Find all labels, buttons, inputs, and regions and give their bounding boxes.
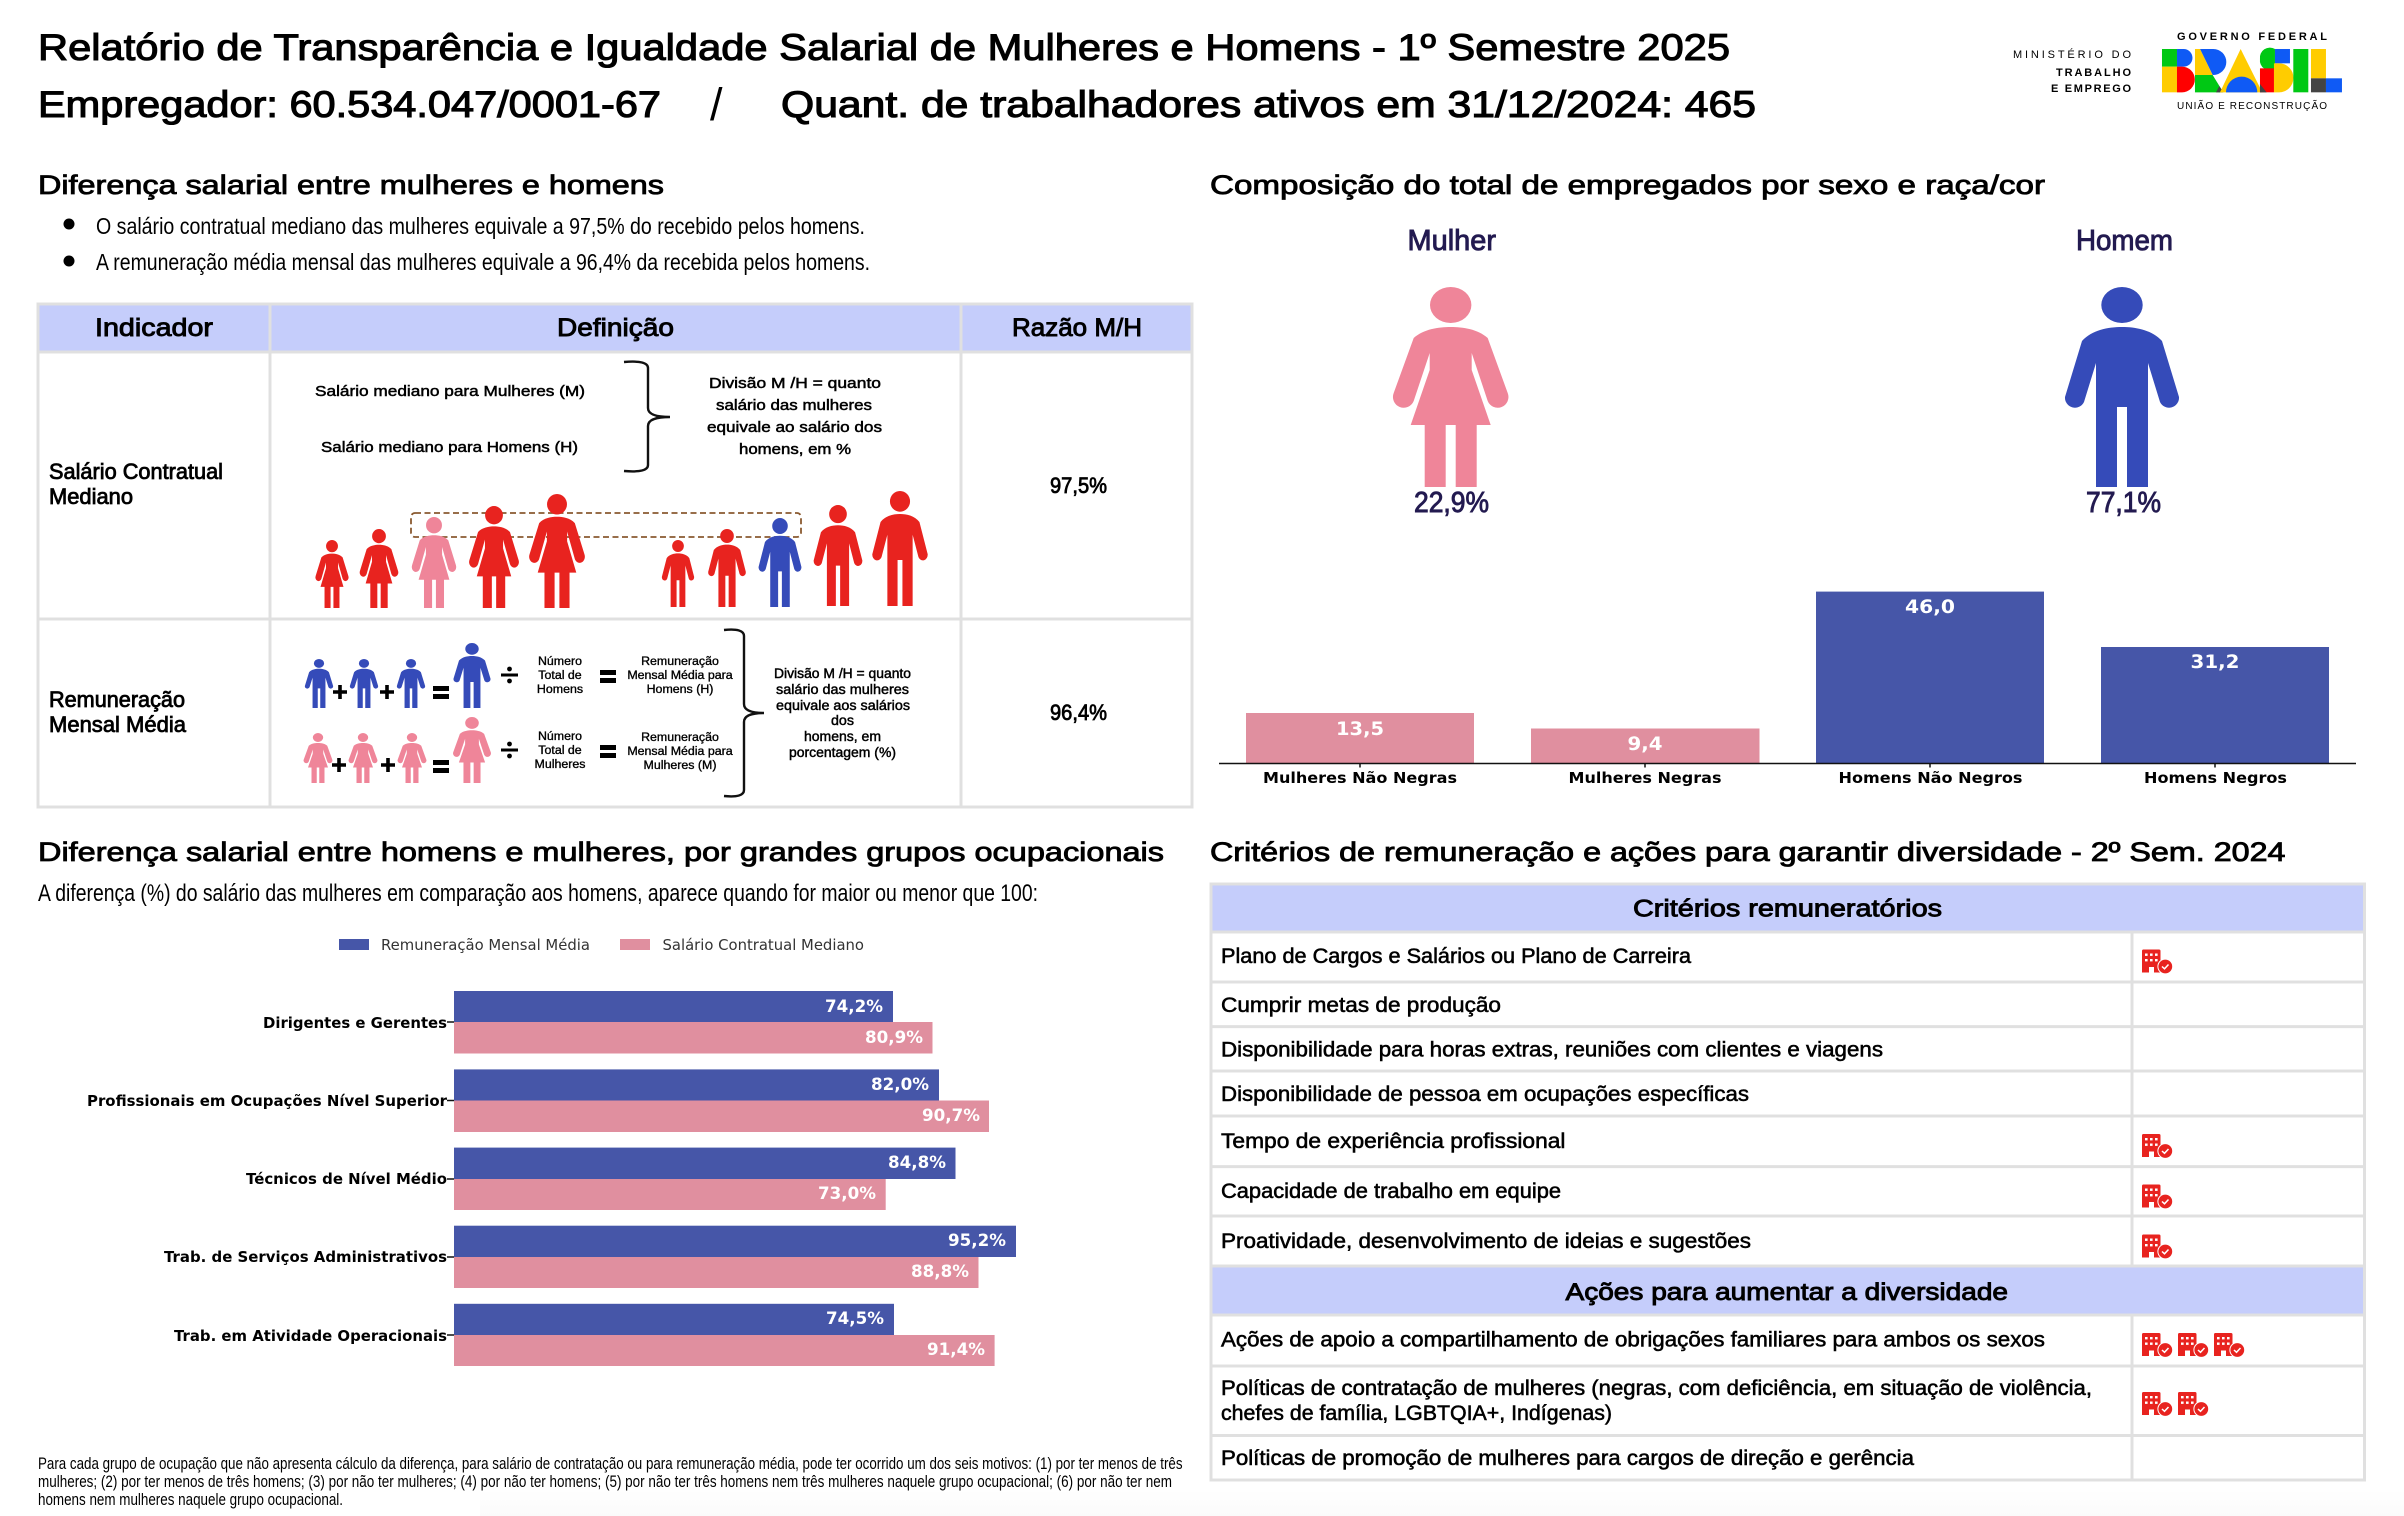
linhas de critérios: Cumprir metas de produção: [1221, 994, 1501, 1017]
bullet list: A remuneração média mensal das mulheres equivale a 96,4% da recebida pelos homens.: [96, 249, 870, 275]
pictograma: homem: 77,1%: [2086, 487, 2161, 519]
nota de rodapé: [38, 1454, 1182, 1509]
definição: salário contratual mediano: [315, 362, 882, 471]
logo: ministério e governo federal: GOVERNO FEDERAL: [2177, 31, 2327, 43]
definição: remuneração mensal média: dos: [831, 713, 854, 728]
nota de rodapé: homens nem mulheres naquele grupo ocupacional.: [38, 1490, 343, 1509]
legenda: Remuneração Mensal Média: [381, 936, 590, 954]
dirigentes e gerentes: 80,9%: [865, 1028, 923, 1048]
definição: remuneração mensal média: Total de: [538, 668, 582, 682]
panel: tabela de indicadores: [38, 304, 1192, 807]
definição: remuneração mensal média: Mensal Média para: [627, 744, 733, 758]
definição: remuneração mensal média: homens, em: [804, 729, 881, 744]
linhas de critérios: [1221, 945, 1883, 1253]
profissionais nível superior: 82,0%: [871, 1075, 929, 1095]
atividade operacionais: [174, 1304, 995, 1366]
title: /: [710, 79, 723, 130]
atividade operacionais: 74,5%: [826, 1309, 884, 1329]
logo: ministério e governo federal: E EMPREGO: [2051, 83, 2131, 95]
gráfico de barras: composição por sexo e raça/cor: 9,4: [1628, 733, 1662, 755]
linhas de ações: Políticas de promoção de mulheres para cargos de direção e gerência: [1221, 1447, 1914, 1470]
linhas de ações: Ações de apoio a compartilhamento de obrigações familiares para ambos os sexos: [1221, 1328, 2045, 1352]
definição: remuneração mensal média: salário das mulheres: [776, 682, 909, 697]
linhas de ações: [1221, 1328, 2092, 1470]
panel: critérios e ações: [1210, 884, 2364, 1480]
gráfico de barras: composição por sexo e raça/cor: 46,0: [1905, 596, 1955, 618]
panel: tabela de indicadores: 96,4%: [1050, 700, 1107, 725]
atividade operacionais: 91,4%: [927, 1340, 985, 1360]
definição: salário contratual mediano: salário das mulheres: [716, 397, 872, 414]
panel: tabela de indicadores: Indicador: [95, 314, 213, 342]
definição: remuneração mensal média: Número: [538, 729, 582, 743]
panel: tabela de indicadores: Mensal Média: [49, 712, 187, 737]
heading: composição: Composição do total de empregados por sexo e raça/cor: [1210, 170, 2045, 200]
gráfico de barras: composição por sexo e raça/cor: Homens Negros: [2144, 769, 2287, 787]
linhas de ações: chefes de família, LGBTQIA+, Indígenas): [1221, 1402, 1612, 1425]
pictograma: homem: Homem: [2076, 225, 2173, 257]
definição: remuneração mensal média: Mulheres (M): [644, 758, 716, 772]
pictograma: mulher: [1393, 225, 1508, 519]
definição: salário contratual mediano: equivale ao salário dos: [707, 419, 882, 436]
definição: remuneração mensal média: Divisão M /H = quanto: [774, 666, 911, 681]
logo: ministério e governo federal: MINISTÉRIO DO: [2013, 48, 2131, 61]
definição: salário contratual mediano: Divisão M /H = quanto: [709, 375, 881, 392]
definição: remuneração mensal média: Número: [538, 654, 582, 668]
serviços administrativos: 88,8%: [911, 1262, 969, 1282]
gráfico de barras: grupos ocupacionais: [87, 991, 1016, 1366]
gráfico de barras: composição por sexo e raça/cor: Homens Não Negros: [1838, 769, 2023, 787]
linhas de critérios: Disponibilidade para horas extras, reuniões com clientes e viagens: [1221, 1038, 1883, 1062]
definição: remuneração mensal média: Remuneração: [641, 654, 719, 668]
linhas de critérios: Disponibilidade de pessoa em ocupações específicas: [1221, 1083, 1749, 1106]
definição: remuneração mensal média: Mensal Média para: [627, 668, 733, 682]
panel: tabela de indicadores: Razão M/H: [1012, 314, 1142, 342]
bottom shading: [480, 1490, 2404, 1516]
logo: ministério e governo federal: TRABALHO: [2056, 67, 2131, 79]
linhas de critérios: Plano de Cargos e Salários ou Plano de Carreira: [1221, 945, 1691, 968]
linhas de critérios: Proatividade, desenvolvimento de ideias e sugestões: [1221, 1230, 1751, 1253]
linhas de critérios: Capacidade de trabalho em equipe: [1221, 1180, 1561, 1203]
linhas de critérios: Tempo de experiência profissional: [1221, 1130, 1566, 1153]
dirigentes e gerentes: 74,2%: [825, 997, 883, 1017]
panel: tabela de indicadores: 97,5%: [1050, 473, 1107, 498]
ilustração: mediana de mulheres e homens: [315, 491, 928, 608]
gráfico de barras: composição por sexo e raça/cor: [1219, 592, 2356, 787]
panel: tabela de indicadores: Mediano: [49, 484, 133, 509]
title: Empregador: 60.534.047/0001-67: [38, 84, 661, 125]
title: Quant. de trabalhadores ativos em 31/12/2024: 465: [781, 84, 1756, 125]
bullet list: O salário contratual mediano das mulheres equivale a 97,5% do recebido pelos homens.: [96, 213, 865, 239]
dirigentes e gerentes: [263, 991, 932, 1054]
panel: tabela de indicadores: Salário Contratual: [49, 459, 223, 484]
serviços administrativos: Trab. de Serviços Administrativos: [164, 1248, 447, 1266]
legenda: [339, 936, 864, 954]
logo: ministério e governo federal: [2013, 31, 2342, 112]
cabeçalho: ações para aumentar a diversidade: Ações para aumentar a diversidade: [1566, 1279, 2008, 1306]
técnicos de nível médio: 84,8%: [888, 1153, 946, 1173]
dirigentes e gerentes: Dirigentes e Gerentes: [263, 1014, 447, 1032]
gráfico de barras: composição por sexo e raça/cor: Mulheres Negras: [1568, 769, 1722, 787]
definição: remuneração mensal média: Mulheres: [535, 757, 585, 771]
pictograma: homem: [2065, 225, 2179, 519]
técnicos de nível médio: 73,0%: [818, 1184, 876, 1204]
heading: diferença salarial: Diferença salarial entre mulheres e homens: [38, 170, 664, 200]
logo: ministério e governo federal: UNIÃO E RECONSTRUÇÃO: [2177, 99, 2327, 112]
definição: remuneração mensal média: porcentagem (%): [789, 745, 896, 760]
definição: salário contratual mediano: Salário mediano para Mulheres (M): [315, 383, 585, 400]
serviços administrativos: 95,2%: [948, 1231, 1006, 1251]
definição: salário contratual mediano: Salário mediano para Homens (H): [321, 439, 578, 456]
definição: remuneração mensal média: Remuneração: [641, 730, 719, 744]
title: Relatório de Transparência e Igualdade Salarial de Mulheres e Homens - 1º Semestre 2025: [38, 27, 1730, 68]
técnicos de nível médio: [246, 1148, 956, 1210]
definição: remuneração mensal média: Homens: [537, 682, 583, 696]
linhas de ações: Políticas de contratação de mulheres (negras, com deficiência, em situação de violência,: [1221, 1377, 2092, 1400]
pictograma: mulher: 22,9%: [1414, 487, 1489, 519]
heading: diferença por grupos ocupacionais: Diferença salarial entre homens e mulheres, por grandes grupos ocupacionais: [38, 837, 1164, 867]
definição: remuneração mensal média: equivale aos salários: [776, 698, 910, 713]
panel: tabela de indicadores: Definição: [557, 314, 674, 342]
cabeçalho: critérios remuneratórios: Critérios remuneratórios: [1633, 896, 1942, 922]
nota de rodapé: mulheres; (2) por ter menos de três homens; (3) por não ter mulheres; (4) por não ter homens; (5) por não ter três homens nem três mulheres naquele grupo ocupacional; (6) por não ter nem: [38, 1472, 1172, 1491]
legenda: Salário Contratual Mediano: [662, 936, 864, 954]
gráfico de barras: composição por sexo e raça/cor: Mulheres Não Negras: [1263, 769, 1457, 787]
ícones: empresa com selo: [2142, 950, 2245, 1416]
profissionais nível superior: Profissionais em Ocupações Nível Superior: [87, 1092, 448, 1110]
profissionais nível superior: [87, 1069, 989, 1132]
definição: salário contratual mediano: homens, em %: [739, 441, 851, 458]
panel: tabela de indicadores: Remuneração: [49, 687, 185, 712]
title: [38, 27, 1756, 130]
nota de rodapé: Para cada grupo de ocupação que não apresenta cálculo da diferença, para salário de contratação ou para remuneração média, pode ter ocorrido um dos seis motivos: (1) por ter menos de três: [38, 1454, 1182, 1473]
gráfico de barras: composição por sexo e raça/cor: 13,5: [1336, 718, 1384, 740]
definição: remuneração mensal média: Homens (H): [647, 682, 713, 696]
heading: critérios de remuneração: Critérios de remuneração e ações para garantir diversidade - 2º Sem. 2024: [1210, 837, 2286, 867]
técnicos de nível médio: Técnicos de Nível Médio: [246, 1170, 447, 1188]
gráfico de barras: composição por sexo e raça/cor: 31,2: [2190, 651, 2240, 673]
definição: remuneração mensal média: Total de: [538, 743, 582, 757]
atividade operacionais: Trab. em Atividade Operacionais: [174, 1327, 447, 1345]
subtítulo: A diferença (%) do salário das mulheres em comparação aos homens, aparece quando for maior ou menor que 100:: [38, 880, 1038, 907]
serviços administrativos: [164, 1226, 1016, 1288]
pictograma: mulher: Mulher: [1408, 225, 1496, 257]
profissionais nível superior: 90,7%: [922, 1106, 980, 1126]
bullet list: [64, 213, 870, 275]
definição: remuneração mensal média: [304, 630, 911, 796]
